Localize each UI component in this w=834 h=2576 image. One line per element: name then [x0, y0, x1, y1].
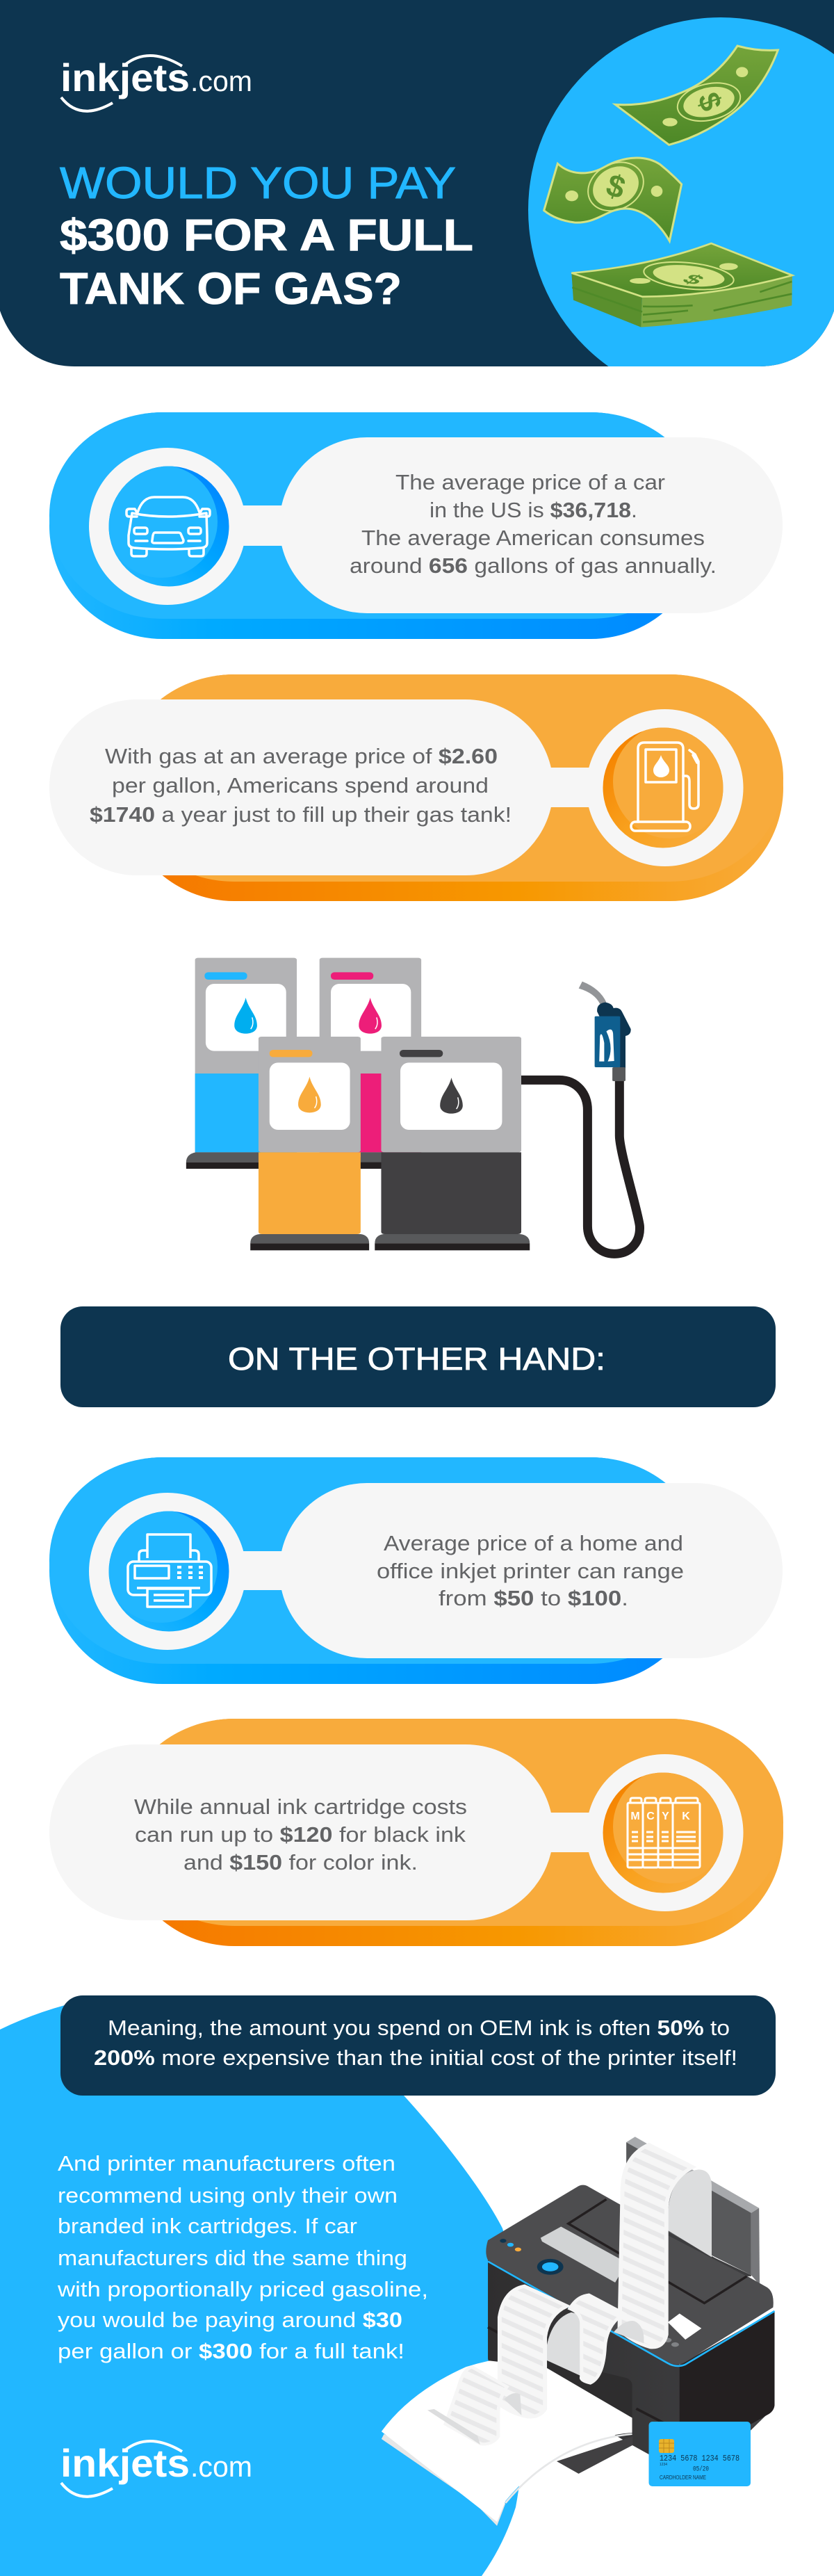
- bill one: $: [691, 88, 728, 115]
- receipt strip: [431, 2145, 712, 2444]
- header blue circle: [528, 17, 834, 403]
- text pill and icon ring: [49, 699, 744, 875]
- text: manufacturers paragraph: [57, 2151, 428, 2363]
- text: gas spending: per gallon, Americans spend around: [112, 773, 489, 797]
- orange pump: [250, 1037, 369, 1250]
- text: car price and gallons: [350, 470, 717, 578]
- footer blue shape: [0, 1999, 525, 2576]
- text: ink costs: [134, 1795, 467, 1874]
- text: printer price: office inkjet printer can range: [377, 1559, 684, 1583]
- header background: [0, 0, 834, 366]
- illustration: ink gas pumps: [186, 958, 640, 1254]
- bill two: $: [602, 167, 630, 206]
- icon: printer: [105, 1510, 229, 1631]
- icon: ink cartridges: C: [646, 1811, 655, 1822]
- text: ink costs: can run up to $120 for black ink: [135, 1822, 466, 1847]
- illustration: printer with receipt: [382, 2137, 775, 2526]
- icon: credit card: 1234: [660, 2463, 667, 2467]
- nozzle: [579, 982, 631, 1081]
- text: printer price: Average price of a home and: [384, 1531, 683, 1555]
- logo: footer inkjets.com: .com: [190, 2450, 252, 2483]
- icon: ink cartridges: [603, 1769, 727, 1893]
- bill stack: $: [677, 272, 709, 288]
- text: gas spending: With gas at an average price of $2.60: [105, 744, 498, 768]
- text: gas spending: [90, 744, 512, 827]
- text: car price and gallons: The average price of a car: [395, 470, 665, 494]
- icon: ink cartridges: K: [682, 1811, 690, 1822]
- blue pill: [49, 412, 704, 639]
- callout: OEM ink cost: [60, 1995, 776, 2096]
- logo: inkjets.com: inkjets: [60, 56, 190, 99]
- text: car price and gallons: around 656 gallons of gas annually.: [350, 553, 717, 578]
- orange pill: [121, 1719, 783, 1946]
- text: manufacturers paragraph: branded ink cartridges. If car: [58, 2214, 357, 2238]
- paper tray: [626, 2137, 760, 2285]
- panel: car price: [49, 412, 783, 639]
- header banner: [0, 0, 834, 403]
- text: manufacturers paragraph: per gallon or $300 for a full tank!: [58, 2339, 404, 2363]
- title: TANK OF GAS?: [60, 264, 402, 314]
- icon: credit card: CARDHOLDER NAME: [660, 2474, 706, 2481]
- icon: ink cartridges: M: [630, 1811, 640, 1822]
- text: ink costs: and $150 for color ink.: [183, 1850, 418, 1874]
- icon: gas pump: [603, 724, 727, 848]
- text: gas spending: $1740 a year just to fill up their gas tank!: [90, 802, 512, 827]
- text: manufacturers paragraph: you would be paying around $30: [58, 2308, 402, 2332]
- cyan pump: [186, 958, 384, 1169]
- text: printer price: from $50 to $100 .: [439, 1586, 628, 1610]
- heading: on the other hand: ON THE OTHER HAND:: [228, 1341, 605, 1377]
- icon: credit card: [649, 2422, 751, 2486]
- icon: credit card: 1234 5678 1234 5678: [660, 2454, 739, 2463]
- panel: gas spending: [49, 674, 783, 901]
- text: manufacturers paragraph: with proportionally priced gasoline,: [57, 2277, 428, 2301]
- text pill and icon ring: [49, 1744, 744, 1920]
- printer body: [488, 2260, 775, 2454]
- black pump: [375, 1037, 530, 1250]
- text: car price and gallons: in the US is $36,718.: [430, 498, 637, 522]
- text: manufacturers paragraph: recommend using only their own: [58, 2183, 398, 2208]
- text: manufacturers paragraph: manufacturers did the same thing: [58, 2246, 407, 2270]
- logo: footer inkjets.com: inkjets: [60, 2441, 190, 2485]
- panel: ink cartridge costs: [49, 1719, 783, 1946]
- logo: inkjets.com: .com: [190, 65, 252, 97]
- callout: OEM ink cost: 200% more expensive than the initial cost of the printer itself!: [94, 2046, 737, 2070]
- printed paper sheet: [382, 2360, 632, 2526]
- panel: printer price: [49, 1457, 783, 1684]
- title: $300 FOR A FULL: [60, 210, 473, 260]
- blue pill: [49, 1457, 704, 1684]
- title: WOULD YOU PAY: [60, 158, 456, 208]
- callout: OEM ink cost: Meaning, the amount you spend on OEM ink is often 50% to: [108, 2016, 730, 2040]
- bill two: [544, 153, 682, 241]
- logo: inkjets.com: [60, 56, 252, 111]
- printer top: [486, 2185, 775, 2366]
- card chip: [659, 2439, 674, 2453]
- logo: footer inkjets.com: [60, 2441, 252, 2497]
- text: ink costs: While annual ink cartridge costs: [134, 1795, 467, 1819]
- icon: falling money: [544, 46, 792, 327]
- icon: car: [105, 465, 229, 587]
- text: car price and gallons: The average American consumes: [361, 526, 705, 550]
- bill stack: [571, 243, 792, 327]
- output tray: [557, 2436, 632, 2474]
- text: manufacturers paragraph: And printer manufacturers often: [58, 2151, 395, 2176]
- text pill and icon ring: [89, 1483, 783, 1658]
- icon: ink cartridges: Y: [662, 1811, 669, 1822]
- title: [60, 158, 473, 314]
- text: printer price: [377, 1531, 684, 1610]
- bill one: [615, 46, 778, 145]
- magenta pump: [320, 958, 421, 1169]
- icon: credit card: 05/20: [693, 2465, 709, 2474]
- hose: [521, 1080, 640, 1254]
- heading: on the other hand: [60, 1306, 776, 1407]
- text pill and icon ring: [89, 437, 783, 613]
- orange pill: [121, 674, 783, 901]
